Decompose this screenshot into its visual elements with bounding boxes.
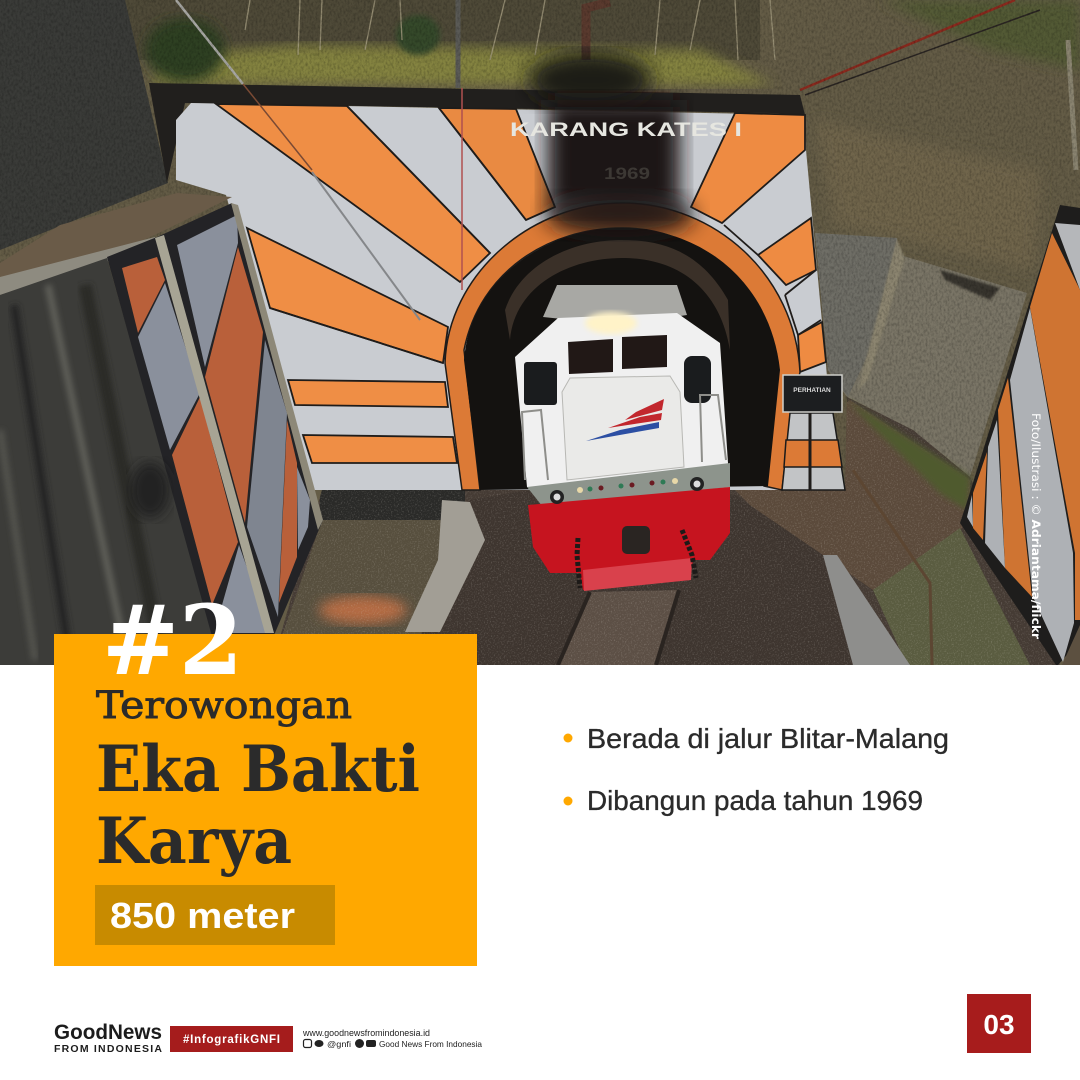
footer brand logo: GoodNews bbox=[54, 1021, 162, 1044]
tree trunks bbox=[245, 0, 775, 60]
icon: facebook bbox=[355, 1039, 364, 1048]
upper left concrete wall bbox=[0, 0, 168, 250]
contact links bbox=[302, 1028, 482, 1049]
rails bbox=[558, 592, 590, 665]
photo credit: Foto/Ilustrasi : © Adriantama/flickr bbox=[1029, 413, 1043, 639]
black exhaust smoke bbox=[528, 52, 695, 237]
length badge: 850 meter bbox=[110, 895, 295, 936]
tunnel name plate bbox=[512, 122, 740, 179]
footer brand logo: FROM INDONESIA bbox=[54, 1043, 162, 1055]
right painted wing wall bbox=[960, 205, 1080, 665]
photo: locomotive leaving the painted tunnel bbox=[0, 0, 1080, 665]
footer brand logo bbox=[54, 1021, 162, 1055]
left wing wall bbox=[0, 193, 323, 665]
warning sign and painted pier bbox=[782, 375, 845, 490]
concrete streaks bbox=[0, 285, 160, 660]
icon: twitter bbox=[314, 1040, 324, 1047]
fact: year built: Dibangun pada tahun 1969 bbox=[587, 785, 923, 816]
tunnel name plate: 1969 bbox=[604, 164, 650, 183]
heading: tunnel name: Karya bbox=[96, 804, 292, 879]
tunnel arch and opening bbox=[445, 203, 800, 490]
ground and ballast bbox=[270, 390, 1080, 665]
hillside and concrete texture bbox=[0, 0, 1080, 480]
contact links: Good News From Indonesia bbox=[379, 1039, 482, 1049]
locomotive bbox=[515, 285, 730, 591]
right concrete wing wall bbox=[815, 233, 1027, 477]
tunnel portal bbox=[149, 83, 830, 490]
hashtag badge: #InfografikGNFI bbox=[183, 1034, 280, 1046]
painted radial stripes bbox=[216, 104, 826, 463]
heading: tunnel name: Eka Bakti bbox=[96, 732, 420, 807]
hashtag badge bbox=[170, 1026, 293, 1052]
tunnel name plate: KARANG KATES I bbox=[510, 120, 742, 141]
fact: location: Berada di jalur Blitar-Malang bbox=[587, 723, 949, 754]
hillside background bbox=[0, 0, 1080, 665]
ranking number: #2 bbox=[102, 584, 243, 697]
page number: 03 bbox=[983, 1009, 1015, 1040]
ground speckle bbox=[270, 390, 1080, 665]
page number bbox=[967, 994, 1031, 1053]
rusty pipe bbox=[853, 470, 932, 665]
length badge bbox=[95, 885, 335, 945]
heading: tunnel name bbox=[96, 732, 420, 879]
panel: tunnel title bbox=[54, 584, 477, 966]
icon: instagram bbox=[304, 1040, 312, 1048]
contact links: @gnfi bbox=[327, 1039, 351, 1049]
text block: facts bbox=[564, 723, 949, 816]
icon: youtube bbox=[366, 1040, 376, 1047]
heading: tunnel label: Terowongan bbox=[96, 684, 352, 727]
warning sign and painted pier: PERHATIAN bbox=[793, 387, 831, 394]
concrete curbs bbox=[405, 500, 485, 632]
grass strip bbox=[847, 400, 970, 510]
contact links: www.goodnewsfromindonesia.id bbox=[302, 1028, 430, 1038]
